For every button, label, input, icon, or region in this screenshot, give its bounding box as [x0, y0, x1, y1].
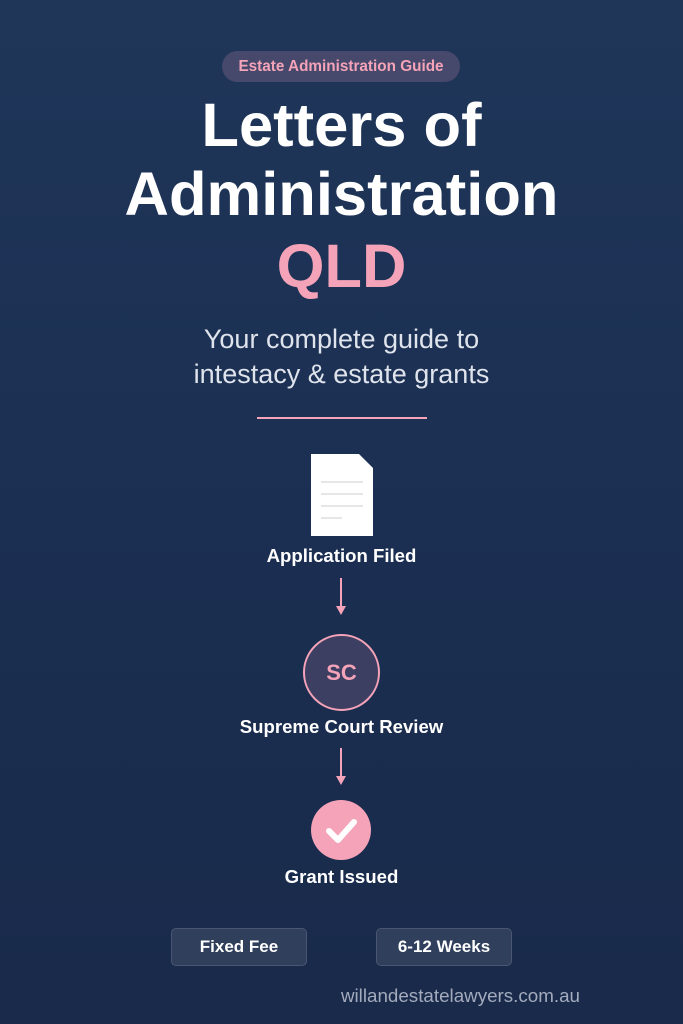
title: Administration — [125, 160, 558, 229]
icon: SC circle — [303, 634, 380, 711]
footer url: willandestatelawyers.com.au — [341, 985, 580, 1006]
icon: check circle — [311, 800, 371, 860]
title — [125, 91, 558, 229]
subtitle: intestacy & estate grants — [194, 359, 489, 389]
title accent: QLD: QLD — [277, 232, 406, 301]
badge: Fixed Fee — [171, 928, 307, 966]
badge: guide label — [222, 51, 460, 82]
title: Letters of — [201, 91, 482, 160]
badge: Fixed Fee: Fixed Fee — [200, 937, 278, 956]
step label: Application Filed: Application Filed — [267, 545, 416, 566]
badge: 6-12 Weeks — [376, 928, 512, 966]
subtitle — [194, 324, 489, 389]
arrow 1 — [336, 578, 346, 615]
badge: 6-12 Weeks: 6-12 Weeks — [398, 937, 490, 956]
step label: Grant Issued: Grant Issued — [285, 866, 398, 887]
icon: SC circle: SC — [326, 660, 357, 685]
subtitle: Your complete guide to — [204, 324, 479, 354]
icon: document — [311, 454, 373, 536]
step label: Supreme Court Review: Supreme Court Review — [240, 716, 443, 737]
badge: guide label: Estate Administration Guide — [238, 58, 444, 75]
arrow 2 — [336, 748, 346, 785]
